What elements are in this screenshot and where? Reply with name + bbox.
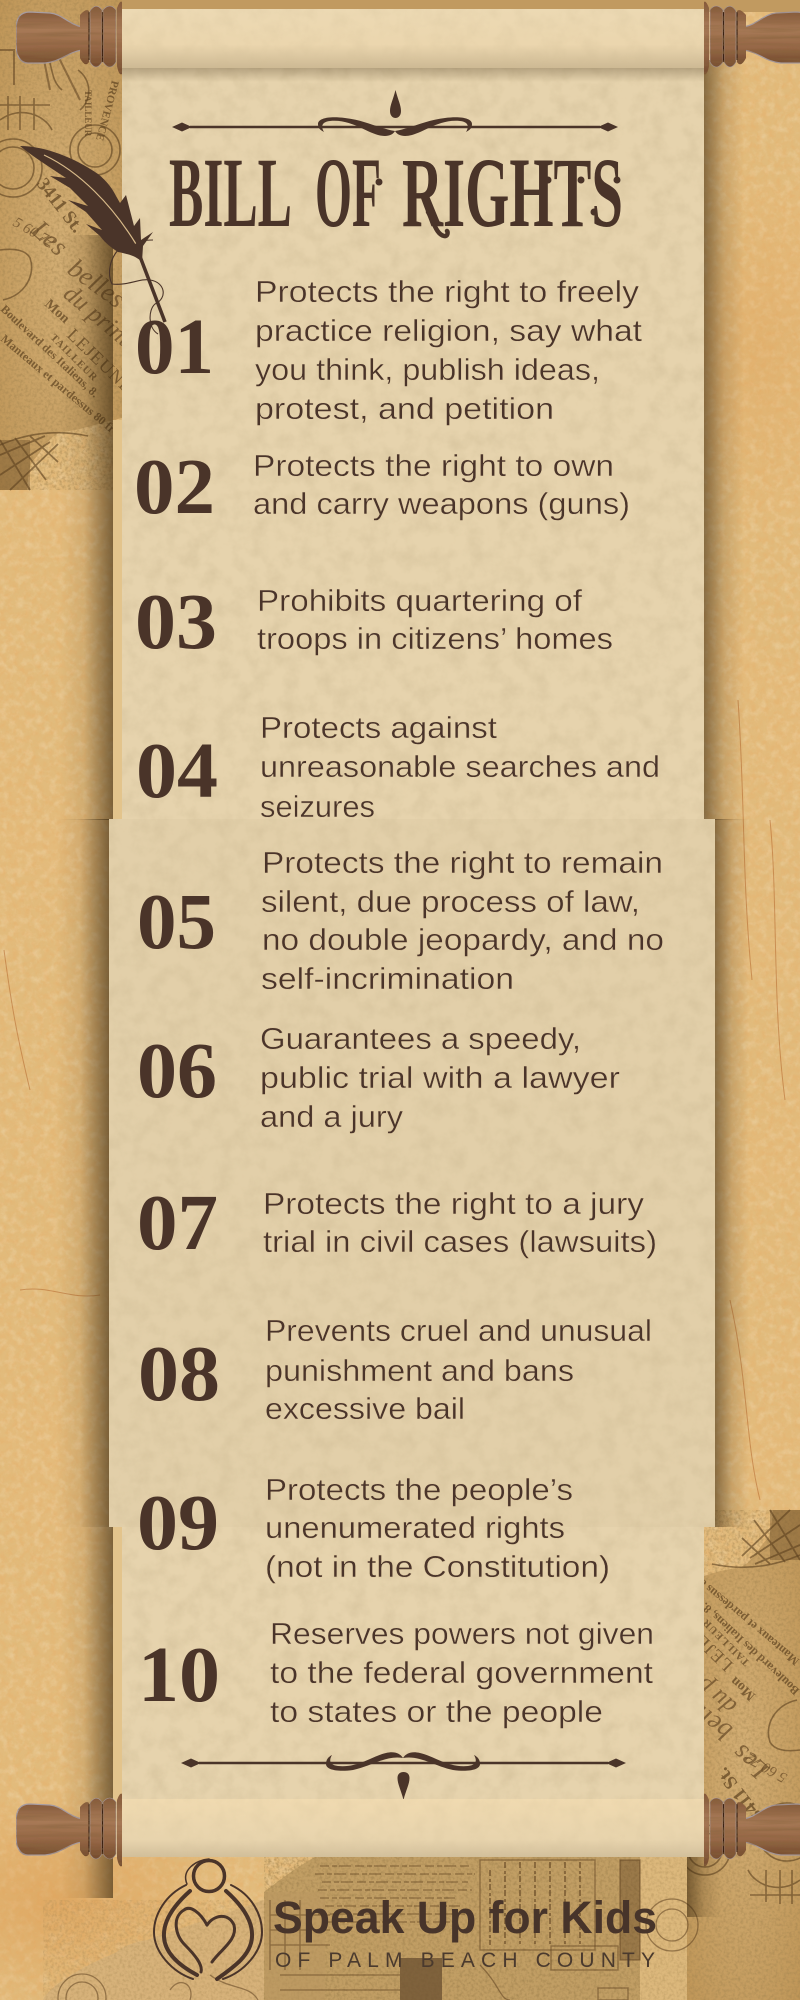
icon: top right wooden knob [704,2,800,74]
background: stamped ephemera, bottom right: Mon [728,1673,759,1703]
text 07 [263,1187,657,1259]
background: stamped ephemera, bottom right: belles [669,1686,738,1747]
background: stamped ephemera, bottom right: 3411 St. [712,1763,768,1826]
right 01 [135,275,643,426]
background: stamped ephemera, top left: 5 60 72 [10,215,57,251]
icon: bottom left wooden knob [16,1794,122,1866]
right 08 [138,1314,652,1426]
ornament: bottom divider [181,1752,626,1800]
ornament: top divider [172,90,618,136]
icon: quill feather [20,146,165,334]
background: stamped ephemera, top left: Boulevard des Italiens, 8. [0,302,102,400]
text 10: Reserves powers not given [270,1617,654,1651]
text 10: to states or the people [270,1695,603,1729]
text 01 [255,275,643,426]
top roller [122,9,704,68]
title [169,137,623,248]
icon: top left wooden knob [16,2,122,74]
title: OF [315,137,381,248]
number 04: 04 [136,728,218,815]
text 02 [253,449,630,521]
text 01: you think, publish ideas, [255,353,600,387]
background: stamped ephemera, bottom right: LEJEUNE [662,1603,737,1676]
background: stamped ephemera, bottom right: 5 60 72 [743,1749,790,1785]
text 04: Protects against [260,711,498,745]
text 04: unreasonable searches and [260,750,660,784]
background: stamped ephemera, top left: Les [25,213,74,262]
background: stamped ephemera, top left: TAILLEUR [83,90,93,137]
right 05 [137,846,664,996]
text 09 [265,1473,610,1584]
organization name: Speak Up for Kids [273,1892,657,1943]
panel: wider middle sheet [109,819,715,1527]
title: RIGHTS [402,137,623,248]
text 01: practice religion, say what [255,314,643,348]
background: collage, bottom band [43,1857,698,2000]
background: stamped ephemera, top left: 3411 St. [32,174,88,237]
text 02: and carry weapons (guns) [253,487,630,521]
right 07 [137,1180,657,1267]
background: stamped ephemera, top left [0,0,800,490]
text 09: Protects the people’s [265,1473,573,1507]
background: stamped ephemera, bottom right: TAILLEUR [700,1616,752,1668]
background: stamped ephemera, bottom right: Manteaux et pardessus 80 fr [681,1564,800,1668]
background: stamped ephemera, bottom right: Boulevard des Italiens, 8. [698,1600,800,1698]
background: stamped ephemera, top left: LEJEUNE [63,324,138,397]
scroll paper [122,60,704,1805]
background: stamped ephemera, top left: Mon [41,297,72,327]
background: stamped ephemera, top left: TAILLEUR [48,332,100,384]
text 03: troops in citizens’ homes [257,622,613,656]
number 07: 07 [137,1180,218,1267]
text 07: trial in civil cases (lawsuits) [263,1225,657,1259]
text 05: no double jeopardy, and no [262,923,664,957]
text 01: Protects the right to freely [255,275,640,309]
organization subtitle: OF PALM BEACH COUNTY [275,1949,655,1972]
icon: bottom right wooden knob [704,1794,800,1866]
text 10: to the federal government [270,1656,654,1690]
background: stamped ephemera, bottom right: Les [726,1738,775,1787]
background: stamped ephemera, bottom right [662,1510,800,2000]
text 03 [257,584,613,656]
title: BILL [169,137,292,248]
right 02 [134,444,630,531]
text 05 [261,846,664,996]
text 05: silent, due process of law, [261,885,640,919]
icon: figure with heart [154,1859,262,1979]
text 08: excessive bail [265,1392,465,1426]
right 03 [135,579,613,666]
text 07: Protects the right to a jury [263,1187,645,1221]
number 09: 09 [137,1480,219,1567]
number 08: 08 [138,1331,220,1418]
number 05: 05 [137,879,216,966]
bottom roller [122,1799,704,1857]
number 10: 10 [138,1632,220,1719]
number 06: 06 [137,1028,217,1115]
text 01: protest, and petition [255,392,554,426]
text 10 [270,1617,654,1729]
right 06 [137,1022,620,1134]
text 09: unenumerated rights [265,1511,565,1545]
background: stamped ephemera, top left: du print [58,280,137,353]
text 08: punishment and bans [265,1354,574,1388]
text 06: and a jury [260,1100,404,1134]
background: stamped ephemera, bottom right: du print [663,1647,742,1720]
background: stamped ephemera, top left: PROVENCE [93,79,121,142]
number 01: 01 [135,304,214,391]
background: stamped ephemera, top left: Manteaux et pardessus 80 fr [0,332,119,436]
text 06: Guarantees a speedy, [260,1022,581,1056]
text 03: Prohibits quartering of [257,584,583,618]
text 06: public trial with a lawyer [260,1061,620,1095]
right 09 [137,1473,610,1584]
text 08 [265,1314,652,1426]
number 03: 03 [135,579,217,666]
text 05: Protects the right to remain [262,846,663,880]
right 04 last line: seizures [260,790,375,824]
background: stamped ephemera, top left: belles [62,253,131,314]
text 06 [260,1022,620,1134]
text 09: (not in the Constitution) [265,1550,610,1584]
text 02: Protects the right to own [253,449,614,483]
number 02: 02 [134,444,215,531]
logo: Speak Up for Kids [154,1859,657,1979]
right 04 [136,711,660,815]
right 10 [138,1617,654,1729]
text 05: self-incrimination [261,962,514,996]
text 08: Prevents cruel and unusual [265,1314,652,1348]
text 04 [260,711,660,784]
